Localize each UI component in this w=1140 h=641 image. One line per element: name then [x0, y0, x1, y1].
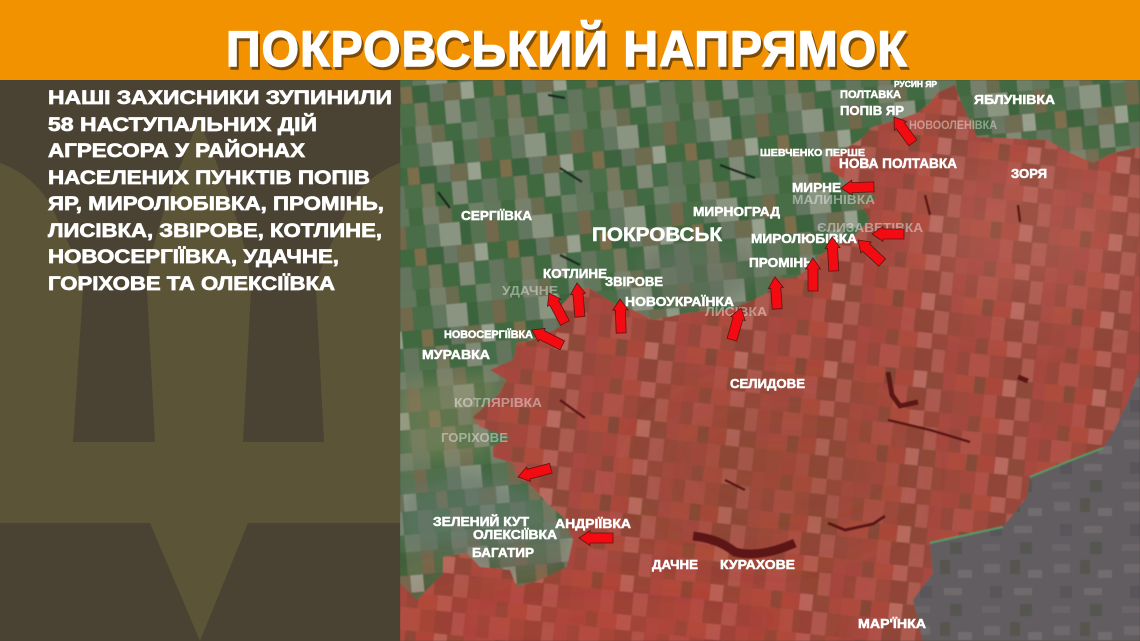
label: Багатир: БАГАТИР: [472, 545, 534, 560]
text block: summary: ГОРІХОВЕ ТА ОЛЕКСІЇВКА: [48, 274, 335, 295]
text block: summary: АГРЕСОРА У РАЙОНАХ: [48, 140, 305, 162]
text block: summary: НАСЕЛЕНИХ ПУНКТІВ ПОПІВ: [48, 168, 370, 189]
arrow: Kotlyne: [570, 282, 587, 318]
label: Лисівка: ЛИСІВКА: [705, 304, 768, 319]
label: Мирне: МИРНЕ: [792, 180, 841, 195]
label: Новоукраїнка: НОВОУКРАЇНКА: [625, 294, 735, 309]
label: Яблунівка: ЯБЛУНІВКА: [974, 92, 1056, 107]
label: Андріївка: АНДРІЇВКА: [555, 516, 632, 531]
label: Нова Полтавка: НОВА ПОЛТАВКА: [839, 155, 957, 171]
label: Шевченко Перше: ШЕВЧЕНКО ПЕРШЕ: [760, 147, 865, 159]
arrow: Popiv Yar: [888, 113, 919, 147]
label: Покровськ: ПОКРОВСЬК: [592, 225, 722, 246]
tan farmland west: [400, 372, 500, 465]
urban area: southwest settlements: [400, 470, 570, 572]
title: ПОКРОВСЬКИЙ НАПРЯМОК: [226, 21, 907, 77]
red tone wash: [400, 85, 1140, 641]
reservoir and ravines: [560, 195, 1028, 554]
darker olive tint center: [687, 414, 876, 539]
text block: summary: ЯР, МИРОЛЮБІВКА, ПРОМІНЬ,: [48, 194, 384, 215]
urban area: Pokrovsk: [640, 240, 760, 312]
label: Полтавка: ПОЛТАВКА: [840, 89, 901, 101]
label: Горіхове: ГОРІХОВЕ: [441, 430, 508, 445]
label: Промінь: ПРОМІНЬ: [749, 255, 813, 270]
arrow: Oleksiivka: [579, 530, 613, 546]
map labels: [422, 79, 1056, 631]
label: Мар'їнка: МАР'ЇНКА: [858, 616, 927, 631]
header band: [0, 0, 1140, 80]
text block: summary: 58 НАСТУПАЛЬНИХ ДІЙ: [48, 114, 317, 136]
title: ПОКРОВСЬКИЙ НАПРЯМОК: [228, 24, 909, 80]
arrow: Zvirove: [613, 299, 629, 333]
Donetsk grey urban sprawl: [913, 370, 1140, 641]
arrow: Lysivka: [725, 306, 748, 342]
label: Малинівка: МАЛИНІВКА: [792, 192, 876, 207]
green tone wash: [400, 80, 1140, 641]
label: Олексіївка: ОЛЕКСІЇВКА: [473, 527, 558, 542]
text block: summary: НАШІ ЗАХИСНИКИ ЗУПИНИЛИ: [48, 88, 392, 109]
arrow: Myroliubivka south: [825, 237, 841, 271]
arrow: Kotlyne west: [542, 289, 572, 327]
icon: trident emblem: [0, 120, 400, 641]
label: Муравка: МУРАВКА: [422, 347, 491, 362]
arrow: Myroliubivka southeast: [853, 235, 887, 268]
arrow: Promin south: [768, 276, 785, 309]
arrow: Horikhove: [516, 461, 553, 484]
saturated tint south: [370, 570, 830, 641]
label: Зелений Кут: ЗЕЛЕНИЙ КУТ: [433, 514, 529, 529]
label: Зоря: ЗОРЯ: [1011, 166, 1047, 181]
label: Сергіївка: СЕРГІЇВКА: [461, 208, 533, 223]
panel: satellite map: [370, 80, 1140, 641]
label: Новооленівка: НОВООЛЕНІВКА: [909, 120, 997, 132]
dark ravines north: [438, 95, 755, 265]
label: Попів Яр: ПОПІВ ЯР: [840, 103, 904, 118]
pink tint northeast: [910, 150, 1140, 310]
label: Звірове: ЗВІРОВЕ: [605, 274, 663, 289]
arrow: Novoserhiivka: [529, 323, 566, 352]
label: Мирноград: МИРНОГРАД: [693, 204, 781, 219]
occupied territory red overlay: [400, 85, 1140, 641]
label: Русин Яр: РУСИН ЯР: [894, 79, 937, 89]
text block: summary: НОВОСЕРГІЇВКА, УДАЧНЕ,: [48, 247, 339, 268]
text block: summary: [48, 88, 392, 295]
label: Котлине: КОТЛИНЕ: [543, 266, 607, 281]
arrow: Myrne: [841, 179, 874, 195]
text block: summary: ЛИСІВКА, ЗВІРОВЕ, КОТЛИНЕ,: [48, 221, 382, 242]
label: Миролюбівка: МИРОЛЮБІВКА: [751, 231, 858, 246]
arrow: Yelyzavetivka: [872, 226, 904, 242]
label: Курахове: КУРАХОВЕ: [720, 557, 795, 572]
panel: left text panel: [0, 80, 400, 641]
arrows: attack directions: [516, 113, 919, 546]
label: Єлизаветівка: ЄЛИЗАВЕТІВКА: [817, 220, 924, 235]
label: Новосергіївка: НОВОСЕРГІЇВКА: [444, 328, 533, 341]
label: Удачне: УДАЧНЕ: [502, 283, 558, 298]
label: Котлярівка: КОТЛЯРІВКА: [454, 395, 543, 410]
label: Дачне: ДАЧНЕ: [652, 557, 698, 572]
label: Селидове: СЕЛИДОВЕ: [730, 376, 805, 391]
arrow: Promin east: [806, 258, 820, 291]
